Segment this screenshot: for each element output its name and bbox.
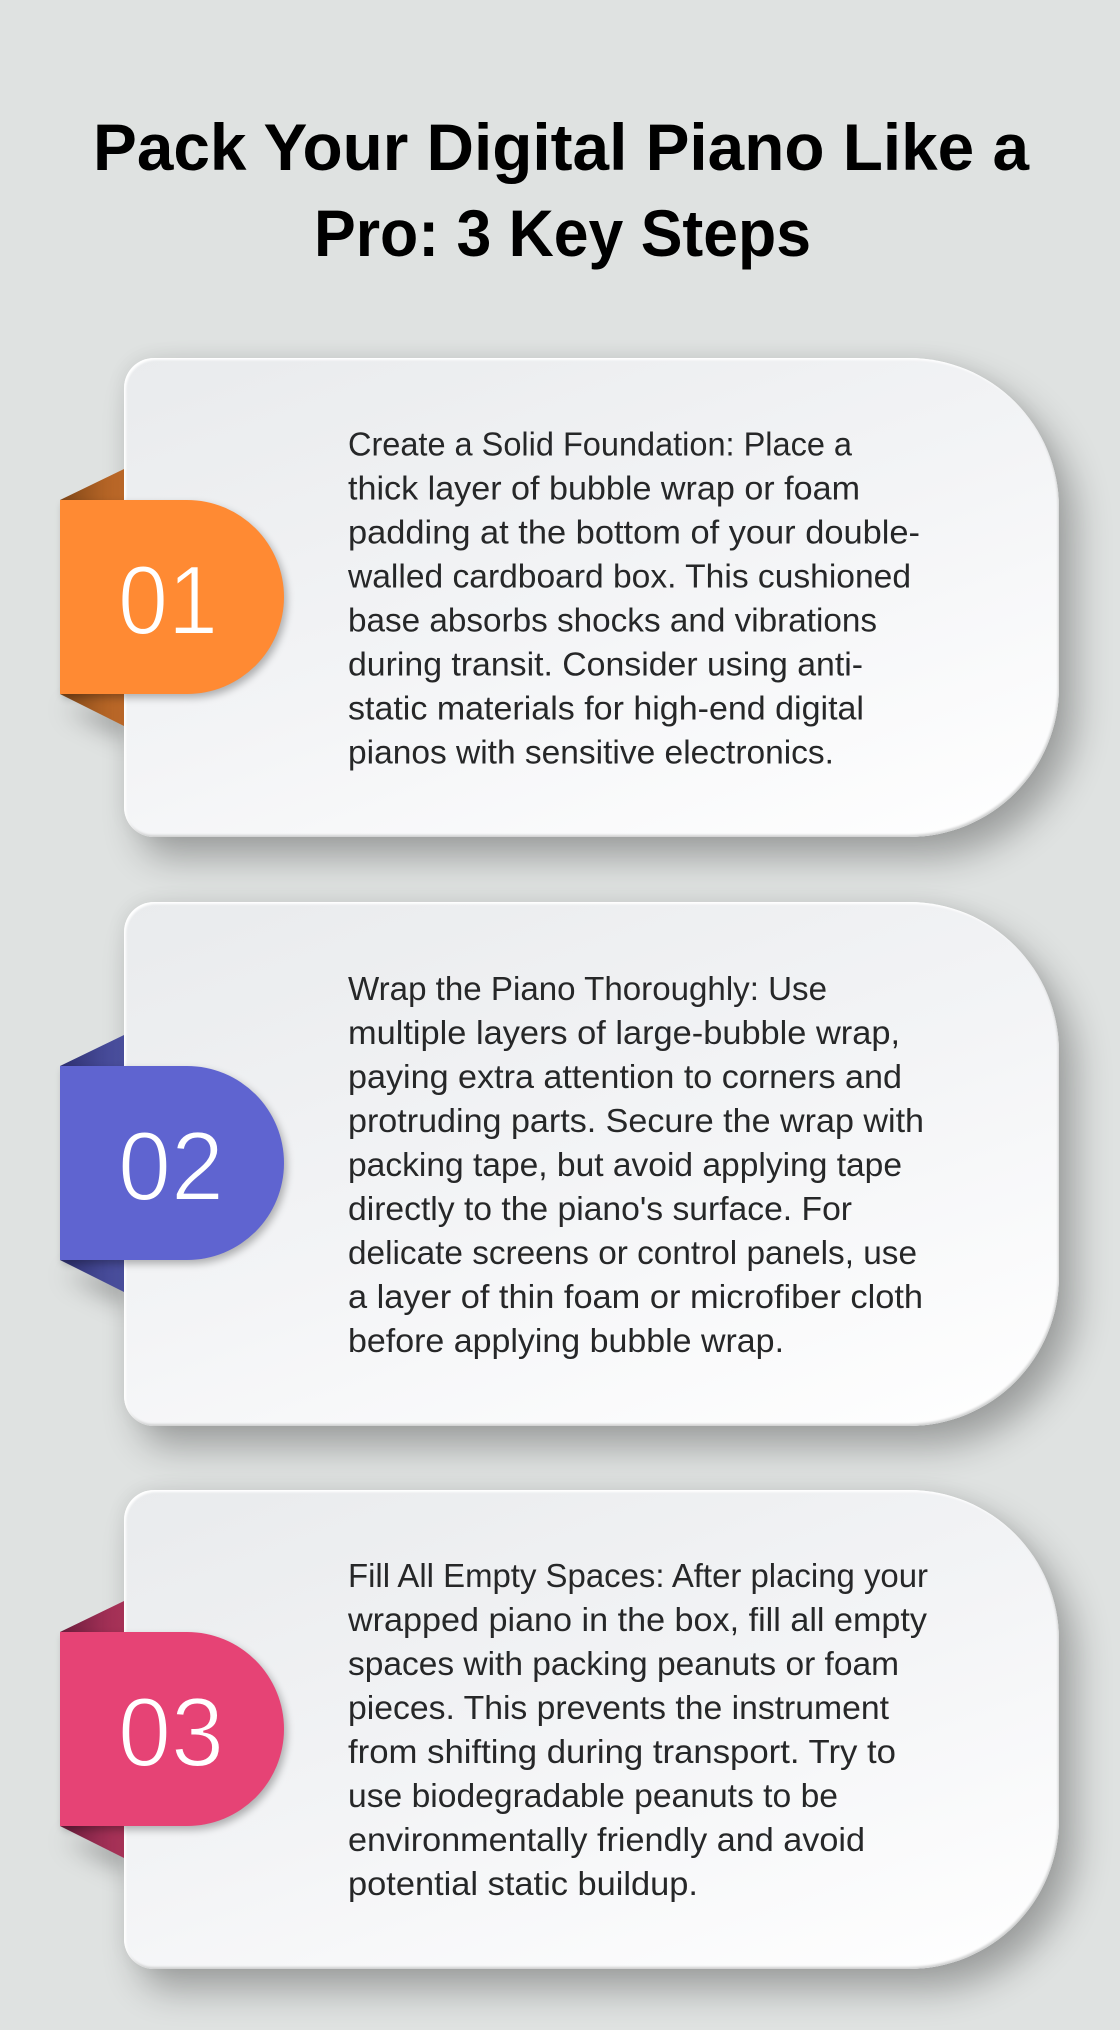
panel: step 1 create a solid foundation — [58, 351, 1095, 877]
text block: step 3: pieces. This prevents the instrument — [348, 1689, 889, 1726]
text block: step 3: environmentally friendly and avoid — [348, 1821, 865, 1858]
text block: step 3: spaces with packing peanuts or foam — [348, 1645, 899, 1682]
card: step 3 — [124, 1490, 1059, 1969]
text block: step 1: thick layer of bubble wrap or foam — [348, 470, 860, 507]
number: 01: 01 — [118, 545, 218, 655]
text block: step 1: base absorbs shocks and vibrations — [348, 602, 877, 639]
ribbon folds: pink — [60, 1601, 124, 1878]
ribbon folds: blue — [60, 1035, 124, 1312]
number tab: 02 — [60, 1066, 284, 1260]
number: 02: 02 — [118, 1111, 224, 1221]
number: 03: 03 — [118, 1677, 224, 1787]
text block: step 3: wrapped piano in the box, fill all empty — [347, 1601, 928, 1638]
text block: step 1: pianos with sensitive electronics. — [348, 734, 834, 771]
text block: step 2: Wrap the Piano Thoroughly: Use — [348, 970, 827, 1007]
text block: step 3: use biodegradable peanuts to be — [348, 1777, 838, 1814]
title — [93, 110, 1030, 270]
panel: step 3 fill all empty spaces — [58, 1483, 1095, 2009]
text block: step 3 — [347, 1557, 928, 1902]
text block: step 2: delicate screens or control panels, use — [348, 1234, 917, 1271]
text block: step 3: from shifting during transport. Try to — [348, 1733, 896, 1770]
text block: step 1: padding at the bottom of your double- — [348, 514, 920, 551]
panel: step 2 wrap the piano thoroughly — [58, 895, 1095, 1466]
text block: step 2: a layer of thin foam or microfiber cloth — [348, 1278, 923, 1315]
text block: step 2: protruding parts. Secure the wrap with — [348, 1102, 924, 1139]
text block: step 2: before applying bubble wrap. — [348, 1322, 784, 1359]
text block: step 1: Create a Solid Foundation: Place a — [348, 426, 853, 463]
text block: step 2: packing tape, but avoid applying tape — [348, 1146, 902, 1183]
title: Pro: 3 Key Steps — [314, 196, 811, 270]
number tab: 01 — [60, 500, 284, 694]
text block: step 2: multiple layers of large-bubble wrap, — [348, 1014, 900, 1051]
text block: step 1: during transit. Consider using anti- — [348, 646, 863, 683]
text block: step 3: Fill All Empty Spaces: After placing your — [348, 1557, 928, 1594]
text block: step 2: paying extra attention to corners and — [348, 1058, 902, 1095]
text block: step 1: static materials for high-end digital — [348, 690, 864, 727]
number tab: 03 — [60, 1632, 284, 1826]
card: step 2 — [124, 902, 1059, 1426]
text block: step 1 — [347, 426, 920, 771]
text block: step 1: walled cardboard box. This cushioned — [347, 558, 911, 595]
card: step 1 — [124, 358, 1059, 837]
ribbon folds: orange — [60, 469, 124, 746]
text block: step 2 — [348, 970, 924, 1359]
title: Pack Your Digital Piano Like a — [93, 110, 1030, 184]
text block: step 3: potential static buildup. — [348, 1865, 698, 1902]
text block: step 2: directly to the piano's surface. For — [348, 1190, 852, 1227]
